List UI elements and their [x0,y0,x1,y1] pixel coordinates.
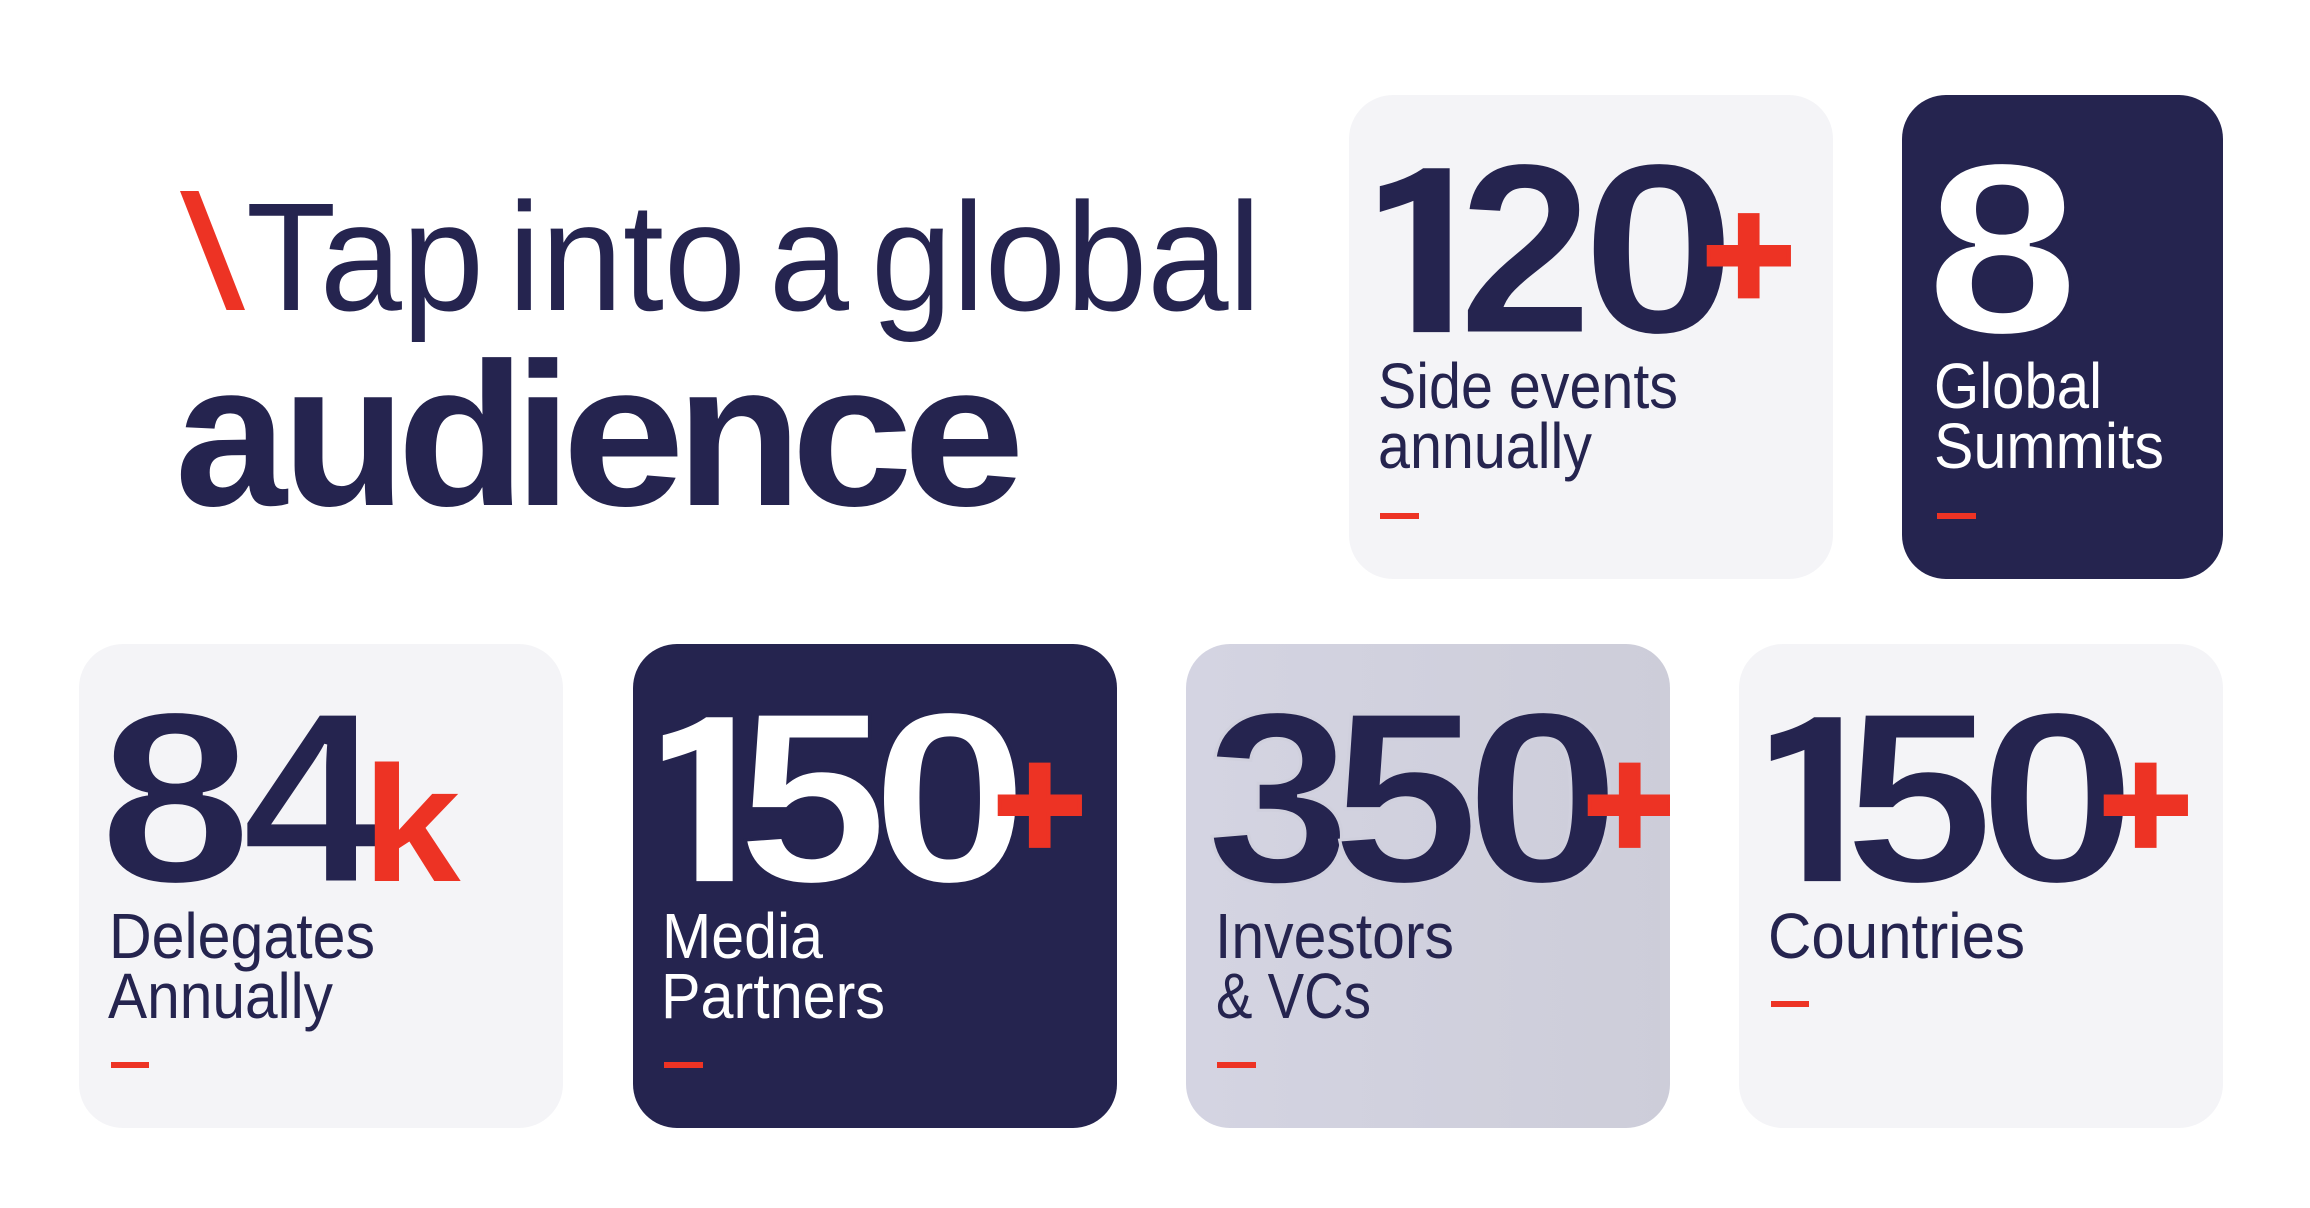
heading line: audience: n [676,321,802,549]
number: 84: 4 [242,661,382,934]
label: Global Summits: Global [1934,350,2102,422]
heading line: Tap into a global: a [769,171,849,343]
number: 150: 1 [1738,692,1898,916]
heading line: Tap into a global: Tap [246,171,484,343]
number: 8: 8 [1926,112,2079,385]
red dash [1937,513,1976,519]
label: Countries: Countries [1768,900,2025,972]
number: 350: 5 [1332,661,1480,934]
heading line: Tap into a global: into [508,171,746,343]
label: Global Summits: Summits [1934,410,2164,482]
label: Media Partners: Partners [661,960,885,1032]
number: 150: 0 [871,661,1029,934]
red k: k [362,732,461,916]
number: 120: 1 [1347,143,1507,367]
label: Investors and VCs: & VCs [1216,960,1371,1032]
heading line: audience: d [397,321,526,549]
number: 150: 0 [1978,661,2137,934]
number: 350: 0 [1465,661,1621,934]
title [175,171,1261,549]
label: Side events annually: annually [1378,410,1592,482]
label: Side events annually: Side events [1378,350,1678,422]
red dash [1217,1062,1256,1068]
red plus: + [993,714,1086,892]
panel: delegates [79,644,563,1128]
red dash [1380,513,1419,519]
label: Delegates Annually: Delegates [109,900,375,972]
label: Delegates Annually: Annually [108,960,333,1032]
number: 150: 5 [737,661,888,934]
panel: media partners [630,644,1117,1128]
card background [1186,644,1670,1128]
heading line: audience: u [282,321,406,549]
red plus: + [1702,164,1795,343]
heading line: audience: i [514,321,572,549]
panel: countries [1738,644,2223,1128]
number: 350: 3 [1206,661,1351,934]
card background [1739,644,2223,1128]
heading line: audience: e [903,321,1025,549]
number: 84: 8 [99,661,252,934]
number: 150: 1 [630,692,790,916]
card background [79,644,563,1128]
card background [1902,95,2223,579]
number: 120: 0 [1581,112,1737,385]
icon: red slash [180,191,245,310]
panel: side events [1347,95,1833,579]
heading line: audience: e [562,321,685,549]
panel: investors and VCs [1186,644,1676,1128]
label: Media Partners: Media [662,900,823,972]
card background [1349,95,1833,579]
red dash [111,1062,149,1068]
label: Investors and VCs: Investors [1215,900,1454,972]
heading line: audience: a [175,321,289,549]
red plus: + [2099,714,2192,892]
number: 120: 2 [1458,112,1593,385]
panel: global summits [1902,95,2223,579]
red dash [1771,1001,1809,1007]
red dash [664,1062,703,1068]
red plus: + [1583,714,1676,892]
card background [633,644,1117,1128]
heading line: Tap into a global: global [871,171,1261,343]
number: 150: 5 [1844,661,1994,934]
heading line: audience: c [791,321,913,549]
